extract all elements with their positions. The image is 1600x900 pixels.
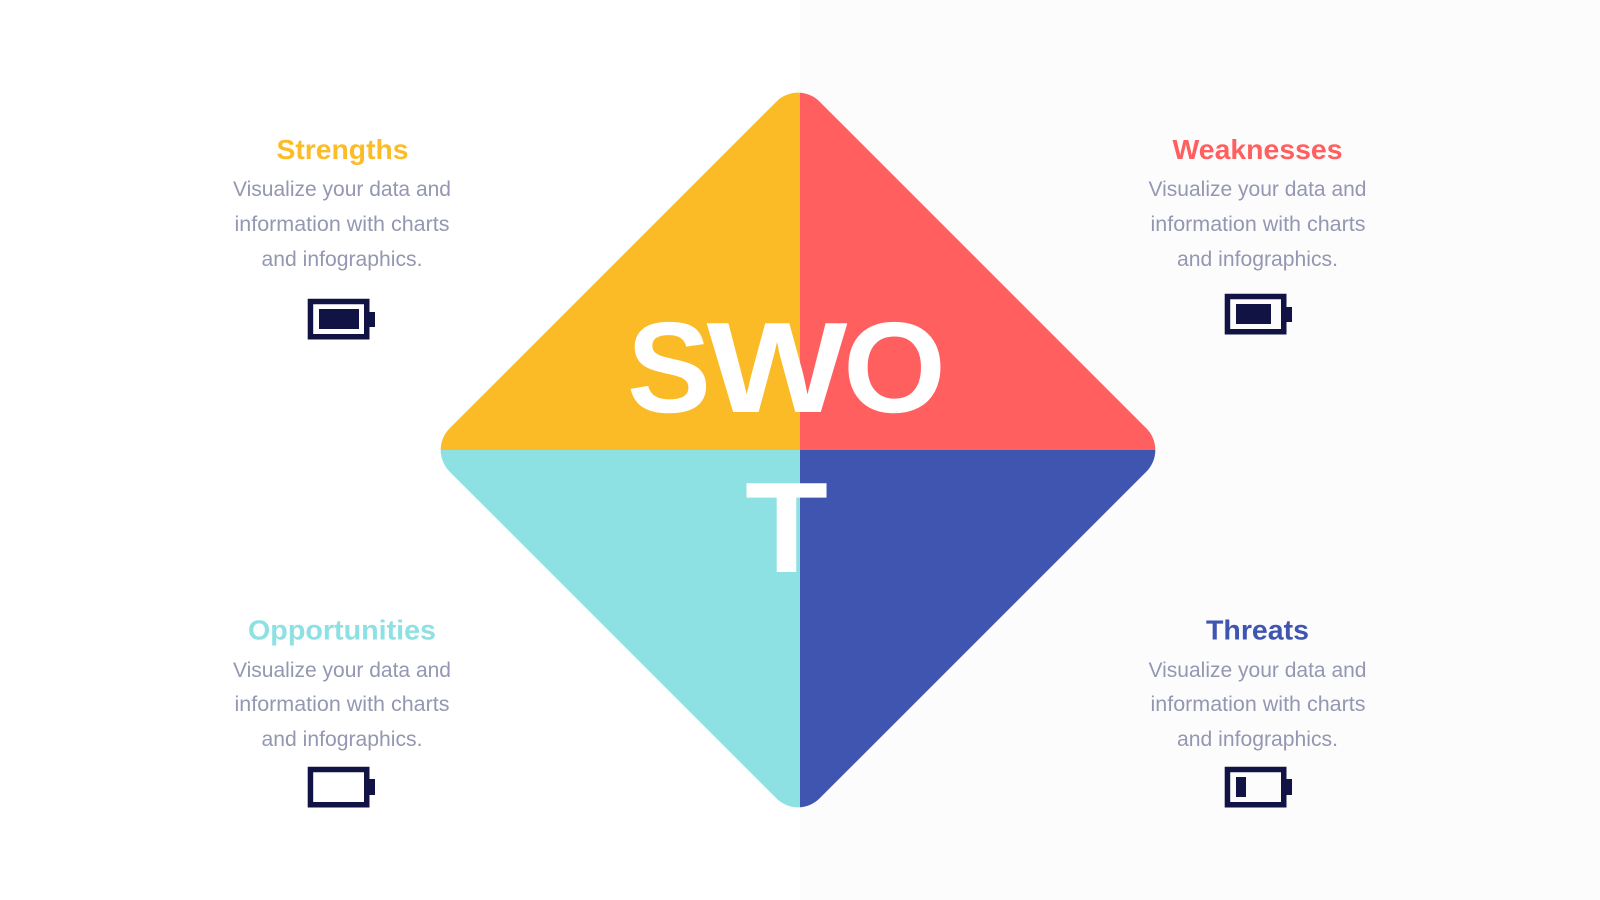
text: weaknesses description [1148, 178, 1366, 271]
text: threats description: Visualize your data and [1148, 659, 1366, 682]
text: threats description: and infographics. [1177, 728, 1338, 751]
text: strengths description: and infographics. [262, 248, 422, 271]
text: strengths description: Visualize your data and [233, 178, 451, 201]
heading: threats: Threats [1206, 614, 1309, 646]
heading: strengths: Strengths [276, 134, 408, 165]
text: opportunities description: Visualize your data and [233, 659, 451, 682]
panel: threats [1148, 614, 1366, 808]
quadrant: opportunities [440, 450, 800, 808]
quadrant: threats [800, 450, 1156, 808]
text: threats description [1148, 659, 1366, 751]
quadrant: weaknesses [800, 80, 1180, 450]
text: strengths description: information with charts [234, 213, 450, 236]
text: opportunities description [233, 659, 451, 751]
title: SWOT [627, 296, 946, 600]
text: weaknesses description: and infographics. [1177, 248, 1338, 271]
text: threats description: information with charts [1150, 693, 1366, 716]
title: SWOT: T [745, 456, 828, 600]
icon: battery low [1225, 767, 1292, 808]
heading: opportunities: Opportunities [248, 614, 436, 646]
heading: weaknesses: Weaknesses [1172, 134, 1342, 165]
title: SWOT: W [706, 296, 848, 440]
icon: battery high [308, 299, 375, 340]
panel: strengths [233, 134, 451, 340]
title: SWOT: S [627, 296, 711, 440]
SWOT diamond [440, 92, 1156, 808]
quadrant: strengths [420, 80, 800, 450]
text: opportunities description: and infographics. [262, 728, 422, 751]
text: opportunities description: information with charts [234, 693, 450, 716]
panel: opportunities [233, 614, 451, 808]
panel: weaknesses [1148, 134, 1366, 334]
title: SWOT: O [843, 296, 946, 440]
text: weaknesses description: information with charts [1150, 213, 1366, 236]
text: weaknesses description: Visualize your data and [1148, 178, 1366, 201]
icon: battery empty [308, 767, 375, 808]
text: strengths description [233, 178, 451, 271]
icon: battery medium [1225, 294, 1292, 334]
